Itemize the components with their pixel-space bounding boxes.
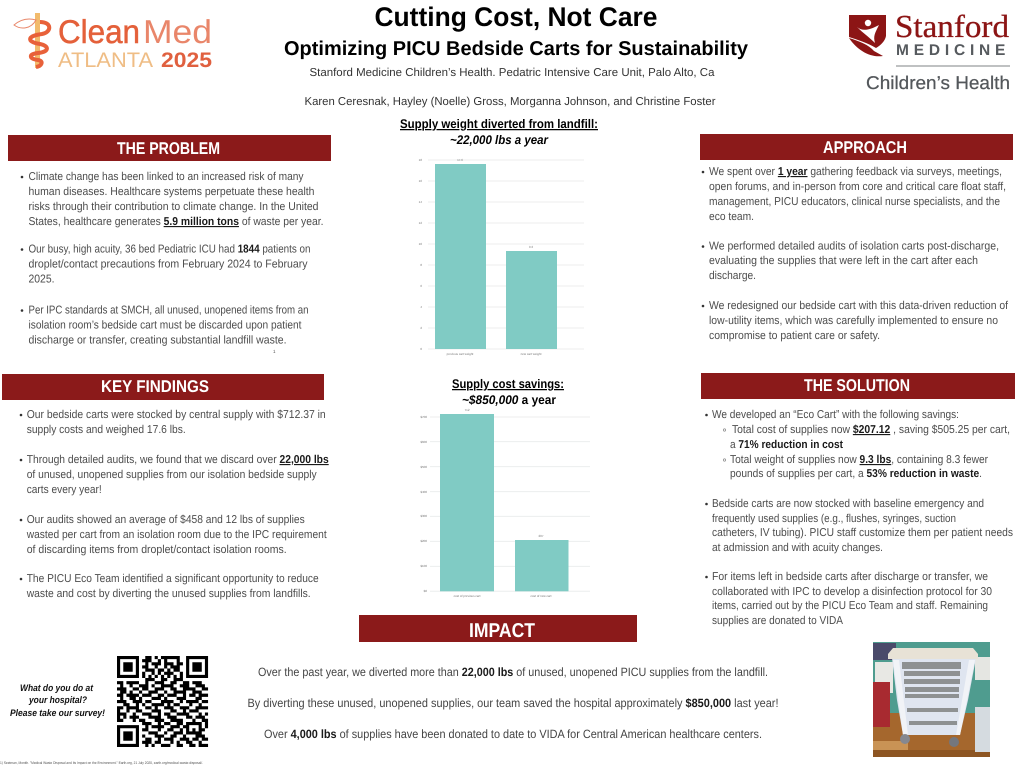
text block: solution bullets: frequently used supplies (e.g., flushes, syringes, suction	[712, 513, 956, 525]
bar chart: supply cost: $300	[420, 514, 427, 518]
text block: problem bullets: Climate change has been linked to an increased risk of many	[28, 171, 304, 183]
text block: problem bullets: risks through their contribution to climate change. In the United	[28, 201, 318, 213]
logo: CleanMed Atlanta 2025: Clean	[58, 13, 140, 50]
bar chart: supply weight: previous cart weight	[447, 352, 474, 356]
bar chart: supply cost: cost of previous cart	[454, 594, 481, 598]
heading: approach: APPROACH	[823, 138, 907, 157]
text block: solution bullets: For items left in bedside carts after discharge or transfer, we	[712, 571, 988, 583]
text block: findings bullets: Our audits showed an average of $458 and 12 lbs of supplies	[27, 514, 305, 526]
panel: the problem	[8, 135, 331, 354]
title	[284, 2, 749, 108]
text block: approach bullets: We spent over 1 year gathering feedback via surveys, meetings,	[709, 166, 1002, 178]
text block: findings bullets: supply costs and weighed 17.6 lbs.	[27, 424, 186, 436]
callout: survey prompt: Please take our survey!	[10, 708, 105, 719]
text block: findings bullets: carts every year!	[27, 484, 102, 496]
heading: the solution: THE SOLUTION	[804, 376, 910, 395]
bar chart: supply cost: $400	[420, 490, 427, 494]
text block: findings bullets: Through detailed audits, we found that we discard over 22,000 lbs	[27, 454, 329, 466]
callout: survey prompt: your hospital?	[28, 695, 87, 706]
subtitle: Optimizing PICU Bedside Carts for Sustainability	[284, 38, 749, 60]
heading: key findings	[2, 374, 324, 400]
text block: findings bullets: of unused, unopened supplies from our isolation bedside supply	[27, 469, 317, 481]
icon: shield	[849, 15, 886, 56]
bar chart: supply cost: 207	[538, 534, 544, 538]
text block: solution bullets: Bedside carts are now stocked with baseline emergency and	[712, 498, 984, 510]
text block: problem bullets: States, healthcare generates 5.9 million tons of waste per year.	[28, 216, 324, 228]
logo: Stanford Medicine Children's Health: MEDICINE	[896, 42, 1010, 59]
text block: solution bullets	[705, 409, 1013, 627]
text block: solution bullets: at admission and with acuity changes.	[712, 542, 883, 554]
text block: impact statements: Over 4,000 lbs of supplies have been donated to date to VIDA for Central American healthcare centers.	[264, 727, 762, 741]
text block: impact statements: Over the past year, we diverted more than 22,000 lbs of unused, unopened PICU supplies from the landfill.	[258, 665, 768, 679]
text block: problem bullets: 2025.	[28, 274, 54, 286]
bar chart: supply cost: $0	[424, 589, 427, 593]
text block: findings bullets: wasted per cart from an isolation room due to the IPC requirement	[26, 529, 327, 541]
bar chart: supply weight: 14	[419, 200, 422, 204]
logo: CleanMed Atlanta 2025	[14, 13, 212, 72]
logo: Stanford Medicine Children's Health: Stanford	[895, 8, 1009, 44]
heading: the solution	[701, 373, 1015, 399]
text block: problem bullets: Per IPC standards at SMCH, all unused, unopened items from an	[28, 304, 308, 316]
text block: solution bullets: We developed an “Eco Cart” with the following savings:	[712, 409, 959, 421]
chart heading: weight	[400, 117, 598, 147]
bar chart: supply cost: $100	[420, 564, 427, 568]
panel: cost chart	[420, 377, 590, 598]
text block: problem bullets: human diseases. Healthcare systems perpetuate these health	[28, 186, 314, 198]
text block: approach bullets: evaluating the supplies that were left in the cart after each	[709, 255, 978, 267]
text block: solution bullets: Total weight of supplies now 9.3 lbs, containing 8.3 fewer	[730, 454, 988, 466]
title: Cutting Cost, Not Care	[374, 2, 658, 32]
text block: findings bullets: waste and cost by diverting the unused supplies from landfills.	[26, 588, 311, 600]
bar chart: supply weight: 6	[420, 284, 422, 288]
text block: findings bullets: The PICU Eco Team identified a significant opportunity to reduce	[27, 573, 319, 585]
panel: key findings	[2, 374, 329, 600]
heading: the problem	[8, 135, 331, 161]
bar chart: supply weight: 2	[420, 326, 422, 330]
callout: survey prompt: What do you do at	[20, 683, 94, 694]
bar chart: supply weight: 0	[420, 347, 422, 351]
text block: findings bullets: Our bedside carts were stocked by central supply with $712.37 in	[27, 409, 326, 421]
heading: approach	[700, 134, 1013, 160]
authors: Karen Ceresnak, Hayley (Noelle) Gross, Morganna Johnson, and Christine Foster	[304, 96, 716, 108]
heading: impact: IMPACT	[469, 620, 535, 642]
bar chart: supply cost: $600	[420, 440, 427, 444]
icon: rod of Asclepius	[14, 13, 49, 68]
bar chart: supply cost: cost of new cart	[530, 594, 552, 598]
text block: problem bullets: discharge or transfer, creating substantial landfill waste.	[28, 334, 286, 346]
heading: the problem: THE PROBLEM	[117, 139, 220, 158]
bar chart: supply cost: $200	[420, 539, 427, 543]
text block: solution bullets: items, carried out by the PICU Eco Team and staff. Remaining	[712, 600, 988, 612]
bar chart: supply cost: $500	[420, 465, 427, 469]
text block: problem bullets: isolation room’s bedside cart must be discarded upon patient	[28, 320, 302, 332]
panel: the solution	[701, 373, 1015, 627]
text block: impact statements	[248, 665, 778, 741]
text block: solution bullets: collaborated with IPC to develop a disinfection protocol for 30	[712, 586, 992, 598]
bar chart: supply weight: 16	[419, 179, 422, 183]
bar chart: supply weight: 12	[419, 221, 422, 225]
callout: survey prompt	[10, 683, 105, 719]
text block: approach bullets: compromise to patient care or safety.	[709, 330, 880, 342]
photo: eco cart	[873, 642, 990, 757]
text block: solution bullets: a 71% reduction in cost	[730, 439, 843, 451]
bar chart: supply cost: 712	[464, 408, 470, 412]
logo: CleanMed Atlanta 2025: Med	[143, 13, 212, 50]
chart heading: weight: ~22,000 lbs a year	[450, 133, 549, 147]
bar chart: supply weight: 4	[420, 305, 422, 309]
bar chart: supply weight: 17.6	[457, 158, 463, 162]
text block: solution bullets: pounds of supplies per cart, a 53% reduction in waste.	[730, 468, 982, 480]
logo: CleanMed Atlanta 2025: 2025	[161, 49, 212, 72]
bar chart: supply weight: new cart weight	[521, 352, 542, 356]
text block: findings bullets: of discarding items from droplet/contact isolation rooms.	[27, 544, 287, 556]
bar chart: supply cost: $700	[420, 415, 427, 419]
heading: key findings: KEY FINDINGS	[101, 377, 209, 396]
text block: problem bullets: 1	[273, 349, 276, 354]
logo: CleanMed Atlanta 2025: ATLANTA	[58, 49, 153, 72]
text block: solution bullets: Total cost of supplies now $207.12 , saving $505.25 per cart,	[732, 424, 1010, 436]
bar chart: supply weight	[419, 158, 584, 356]
panel: impact	[248, 615, 778, 741]
bar chart: supply weight: 8	[420, 263, 422, 267]
bar chart: supply weight: 18	[419, 158, 422, 162]
logo: Stanford Medicine Children's Health: Children’s Health	[866, 72, 1010, 93]
bar chart: supply cost	[420, 408, 590, 598]
text block: solution bullets: supplies are donated to VIDA	[712, 615, 843, 627]
chart heading: cost	[452, 377, 564, 407]
panel: approach	[700, 134, 1013, 342]
text block: problem bullets: Our busy, high acuity, 36 bed Pediatric ICU had 1844 patients on	[28, 244, 310, 256]
text block: problem bullets	[21, 171, 323, 354]
text block: approach bullets: eco team.	[709, 211, 754, 223]
heading: impact	[359, 615, 637, 642]
text block: approach bullets: low-utility items, which was carefully implemented to ensure no	[709, 315, 998, 327]
bar chart: supply weight: 10	[419, 242, 422, 246]
chart heading: cost: Supply cost savings:	[452, 377, 564, 391]
text block: approach bullets: discharge.	[709, 270, 756, 282]
text block: findings bullets	[20, 409, 329, 600]
QR code	[117, 658, 208, 745]
text block: impact statements: By diverting these unused, unopened supplies, our team saved the hospital approximately $850,000 last year!	[248, 696, 778, 710]
bar chart: supply weight: 9.3	[529, 245, 533, 249]
citation: 1) Seetman, Monith. "Medical Waste Disposal and Its Impact on the Environment." Earth.org, 21 July 2020, earth.org/medical-waste-disposal/.	[0, 761, 203, 765]
chart heading: weight: Supply weight diverted from landfill:	[400, 117, 598, 131]
affiliation: Stanford Medicine Children’s Health. Pedatric Intensive Care Unit, Palo Alto, Ca	[310, 67, 715, 79]
text block: approach bullets: We performed detailed audits of isolation carts post-discharge,	[709, 240, 999, 252]
logo: Stanford Medicine Children's Health	[849, 8, 1010, 93]
panel: weight chart	[400, 117, 598, 356]
chart heading: cost: ~$850,000 a year	[462, 393, 556, 407]
text block: approach bullets	[702, 166, 1009, 342]
text block: problem bullets: droplet/contact precautions from February 2024 to February	[28, 258, 308, 270]
